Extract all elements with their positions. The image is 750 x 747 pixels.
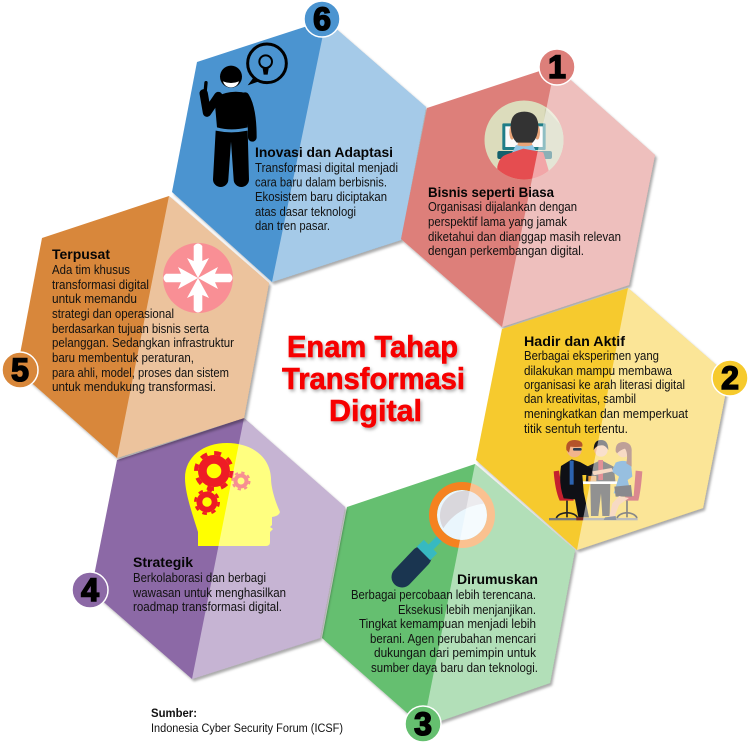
text: inovasi dan adaptasi: atas dasar teknologi	[255, 205, 356, 219]
panel: tahap 1 bisnis seperti biasa	[401, 49, 655, 327]
text: inovasi dan adaptasi: dan tren pasar.	[255, 219, 330, 233]
badge 6	[304, 1, 340, 37]
badge 5	[2, 352, 38, 388]
badge 4	[72, 572, 108, 608]
icon: person with light bulb idea	[204, 44, 286, 187]
text: bisnis seperti biasa: dengan perkembangan digital.	[428, 244, 584, 258]
text: dirumuskan: sumber daya baru dan teknologi.	[371, 661, 538, 675]
light half 4	[192, 418, 345, 679]
text: hadir dan aktif: titik sentuh tertentu.	[524, 422, 628, 436]
text: dirumuskan: Eksekusi lebih menjanjikan.	[398, 603, 536, 617]
icon: magnifying glass	[402, 486, 491, 577]
light half 3	[423, 464, 575, 727]
badge 1	[539, 49, 575, 85]
text: bisnis seperti biasa: Organisasi dijalankan dengan	[428, 200, 577, 214]
text: strategik: Strategik	[133, 555, 193, 571]
title: Digital	[329, 394, 422, 428]
hexagon 1	[401, 66, 655, 327]
light half 6	[272, 20, 426, 282]
text: hadir dan aktif: Hadir dan Aktif	[524, 334, 625, 350]
text: terpusat: Ada tim khusus	[52, 263, 130, 277]
light half 2	[577, 288, 729, 550]
text: strategik: Berkolaborasi dan berbagi	[133, 571, 266, 585]
text: terpusat: pelanggan. Sedangkan infrastruktur	[52, 336, 234, 350]
title: Enam Tahap	[287, 330, 458, 364]
text: terpusat: para ahli, model, proses dan sistem	[52, 366, 229, 380]
text: dirumuskan: berani. Agen perubahan mencari	[370, 632, 536, 646]
panel: tahap 2 hadir dan aktif	[476, 288, 748, 550]
text: bisnis seperti biasa: perspektif lama yang jamak	[428, 215, 568, 229]
woman	[612, 461, 632, 493]
text: terpusat	[52, 247, 234, 394]
left man	[560, 459, 593, 517]
panel: tahap 5 terpusat	[2, 196, 269, 458]
icon: pink circle	[163, 243, 233, 313]
badge 2: 2	[721, 360, 739, 396]
text: dirumuskan: Berbagai percobaan lebih terencana.	[351, 588, 536, 602]
badge 3: 3	[414, 706, 432, 742]
text: terpusat: strategi dan operasional	[52, 307, 174, 321]
text: terpusat: Terpusat	[52, 247, 110, 263]
text: inovasi dan adaptasi: Ekosistem baru diciptakan	[255, 190, 387, 204]
hexagon 3	[322, 464, 575, 727]
hexagon 2	[476, 288, 729, 550]
panel: tahap 3 dirumuskan	[322, 464, 575, 742]
source note	[151, 706, 343, 735]
badge 4: 4	[81, 572, 99, 608]
text: bisnis seperti biasa: diketahui dan dianggap masih relevan	[428, 230, 621, 244]
text: terpusat: berdasarkan tujuan bisnis serta	[52, 322, 209, 336]
text: terpusat: transformasi digital	[52, 278, 149, 292]
text: inovasi dan adaptasi: cara baru dalam berbisnis.	[255, 176, 387, 190]
badge 6: 6	[313, 1, 331, 37]
middle man	[586, 460, 616, 516]
badge 3	[405, 706, 441, 742]
light half 1	[502, 66, 655, 327]
badge 5: 5	[11, 352, 29, 388]
left chair	[554, 471, 574, 501]
icon: arrows converging	[164, 244, 232, 312]
panel: tahap 6 inovasi dan adaptasi	[172, 1, 426, 282]
icon: person at laptop	[484, 100, 564, 180]
text: hadir dan aktif: dan kreativitas, sambil	[524, 392, 636, 406]
text: inovasi dan adaptasi	[255, 145, 398, 233]
text: bisnis seperti biasa	[428, 185, 621, 258]
icon: business meeting	[549, 440, 642, 520]
title	[282, 330, 465, 428]
text: dirumuskan: dukungan dari pemimpin untuk	[374, 646, 537, 660]
text: strategik	[132, 555, 286, 614]
panel: tahap 4 strategik	[72, 418, 345, 679]
text: terpusat: untuk mendukung transformasi.	[52, 380, 216, 394]
title: Transformasi	[282, 362, 465, 396]
hexagon 6	[172, 20, 426, 282]
text: dirumuskan: Dirumuskan	[457, 572, 538, 588]
text: hadir dan aktif: Berbagai eksperimen yang	[524, 349, 659, 363]
text: hadir dan aktif: organisasi ke arah literasi digital	[524, 378, 685, 392]
source note: Sumber:	[151, 706, 197, 720]
light half 5	[117, 196, 269, 458]
source note: Indonesia Cyber Security Forum (ICSF)	[151, 721, 343, 735]
text: inovasi dan adaptasi: Inovasi dan Adaptasi	[255, 145, 393, 161]
text: hadir dan aktif	[524, 334, 688, 436]
right chair	[624, 471, 642, 501]
text: terpusat: untuk memandu	[52, 292, 137, 306]
text: dirumuskan	[351, 572, 538, 675]
text: strategik: roadmap transformasi digital.	[133, 600, 282, 614]
text: hadir dan aktif: meningkatkan dan memperkuat	[524, 407, 688, 421]
table	[582, 481, 617, 484]
badge 1: 1	[548, 49, 566, 85]
hexagon 5	[17, 196, 269, 458]
text: dirumuskan: Tingkat kemampuan menjadi lebih	[359, 617, 536, 631]
text: bisnis seperti biasa: Bisnis seperti Biasa	[428, 185, 554, 201]
text: terpusat: baru membentuk peraturan,	[52, 351, 194, 365]
icon: head with gears	[185, 443, 280, 546]
hexagon 4	[91, 418, 345, 679]
badge 2	[712, 360, 748, 396]
text: strategik: wawasan untuk menghasilkan	[132, 586, 286, 600]
text: inovasi dan adaptasi: Transformasi digital menjadi	[255, 161, 398, 175]
text: hadir dan aktif: dilakukan mampu membawa	[524, 364, 672, 378]
